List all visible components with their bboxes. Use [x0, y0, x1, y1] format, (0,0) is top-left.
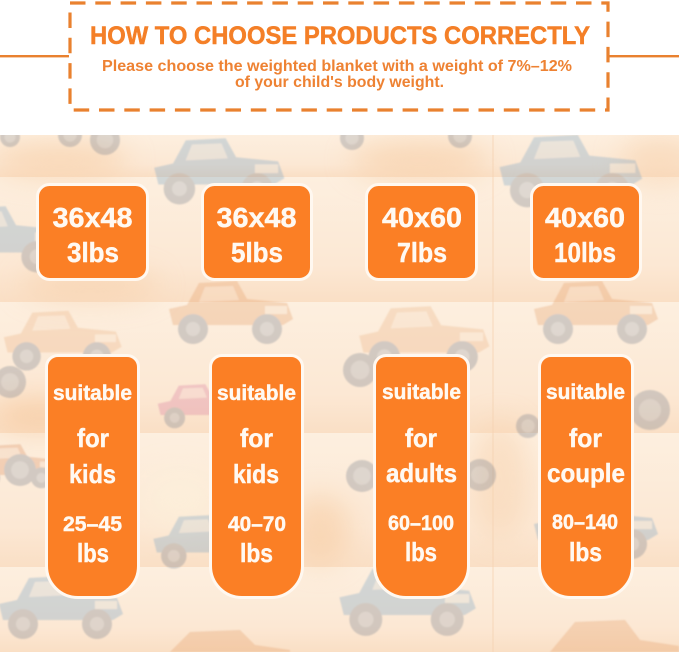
- suitability card: kids 40–70 lbs: lbs: [240, 538, 273, 568]
- size card: 40x60 7lbs: 7lbs: [397, 237, 447, 268]
- size card: 40x60 10lbs: 40x60: [545, 202, 625, 233]
- suitability card: couple 80–140 lbs: for: [569, 423, 602, 453]
- suitability card: couple 80–140 lbs: [540, 356, 632, 598]
- suitability card: kids 40–70 lbs: kids: [233, 459, 279, 489]
- suitability card: kids 25–45 lbs: suitable: [53, 382, 132, 405]
- dashed header box: [70, 3, 608, 110]
- size card: 36x48 5lbs: 36x48: [216, 202, 296, 233]
- suitability card: kids 25–45 lbs: [46, 356, 138, 598]
- suitability card: couple 80–140 lbs: lbs: [569, 537, 602, 567]
- suitability card: couple 80–140 lbs: couple: [547, 458, 625, 488]
- suitability card: couple 80–140 lbs: 80–140: [552, 511, 618, 534]
- header line right: [609, 55, 679, 57]
- size card: 36x48 3lbs: 3lbs: [67, 237, 119, 268]
- header line left: [0, 55, 69, 57]
- suitability card: adults 60–100 lbs: 60–100: [388, 512, 454, 535]
- suitability card: kids 25–45 lbs: kids: [69, 459, 116, 489]
- subtitle: [102, 58, 572, 91]
- size card: 40x60 10lbs: 10lbs: [554, 237, 616, 268]
- subtitle: of your child's body weight.: [235, 74, 444, 91]
- size card: 40x60 7lbs: [366, 184, 476, 280]
- suitability card: couple 80–140 lbs: suitable: [546, 381, 625, 404]
- size card: 36x48 3lbs: 36x48: [52, 202, 132, 233]
- suitability card: kids 40–70 lbs: 40–70: [228, 513, 286, 536]
- subtitle: Please choose the weighted blanket with a weight of 7%–12%: [102, 58, 572, 75]
- suitability card: adults 60–100 lbs: [374, 356, 468, 598]
- size card: 40x60 10lbs: [532, 184, 640, 280]
- suitability card: kids 25–45 lbs: 25–45: [63, 513, 122, 536]
- suitability card: kids 25–45 lbs: lbs: [77, 538, 109, 568]
- size card: 36x48 5lbs: 5lbs: [231, 237, 283, 268]
- size card: 40x60 7lbs: 40x60: [382, 202, 462, 233]
- suitability card: kids 40–70 lbs: [210, 356, 302, 598]
- suitability card: kids 40–70 lbs: for: [240, 423, 273, 453]
- title: HOW TO CHOOSE PRODUCTS CORRECTLY: [90, 22, 590, 50]
- size card: 36x48 5lbs: [202, 184, 312, 280]
- size card: 36x48 3lbs: [38, 184, 148, 280]
- suitability card: adults 60–100 lbs: lbs: [405, 537, 437, 567]
- suitability card: adults 60–100 lbs: suitable: [382, 381, 461, 404]
- suitability card: adults 60–100 lbs: adults: [386, 458, 457, 488]
- suitability card: kids 25–45 lbs: for: [77, 423, 109, 453]
- suitability card: kids 40–70 lbs: suitable: [217, 382, 296, 405]
- suitability card: adults 60–100 lbs: for: [405, 423, 437, 453]
